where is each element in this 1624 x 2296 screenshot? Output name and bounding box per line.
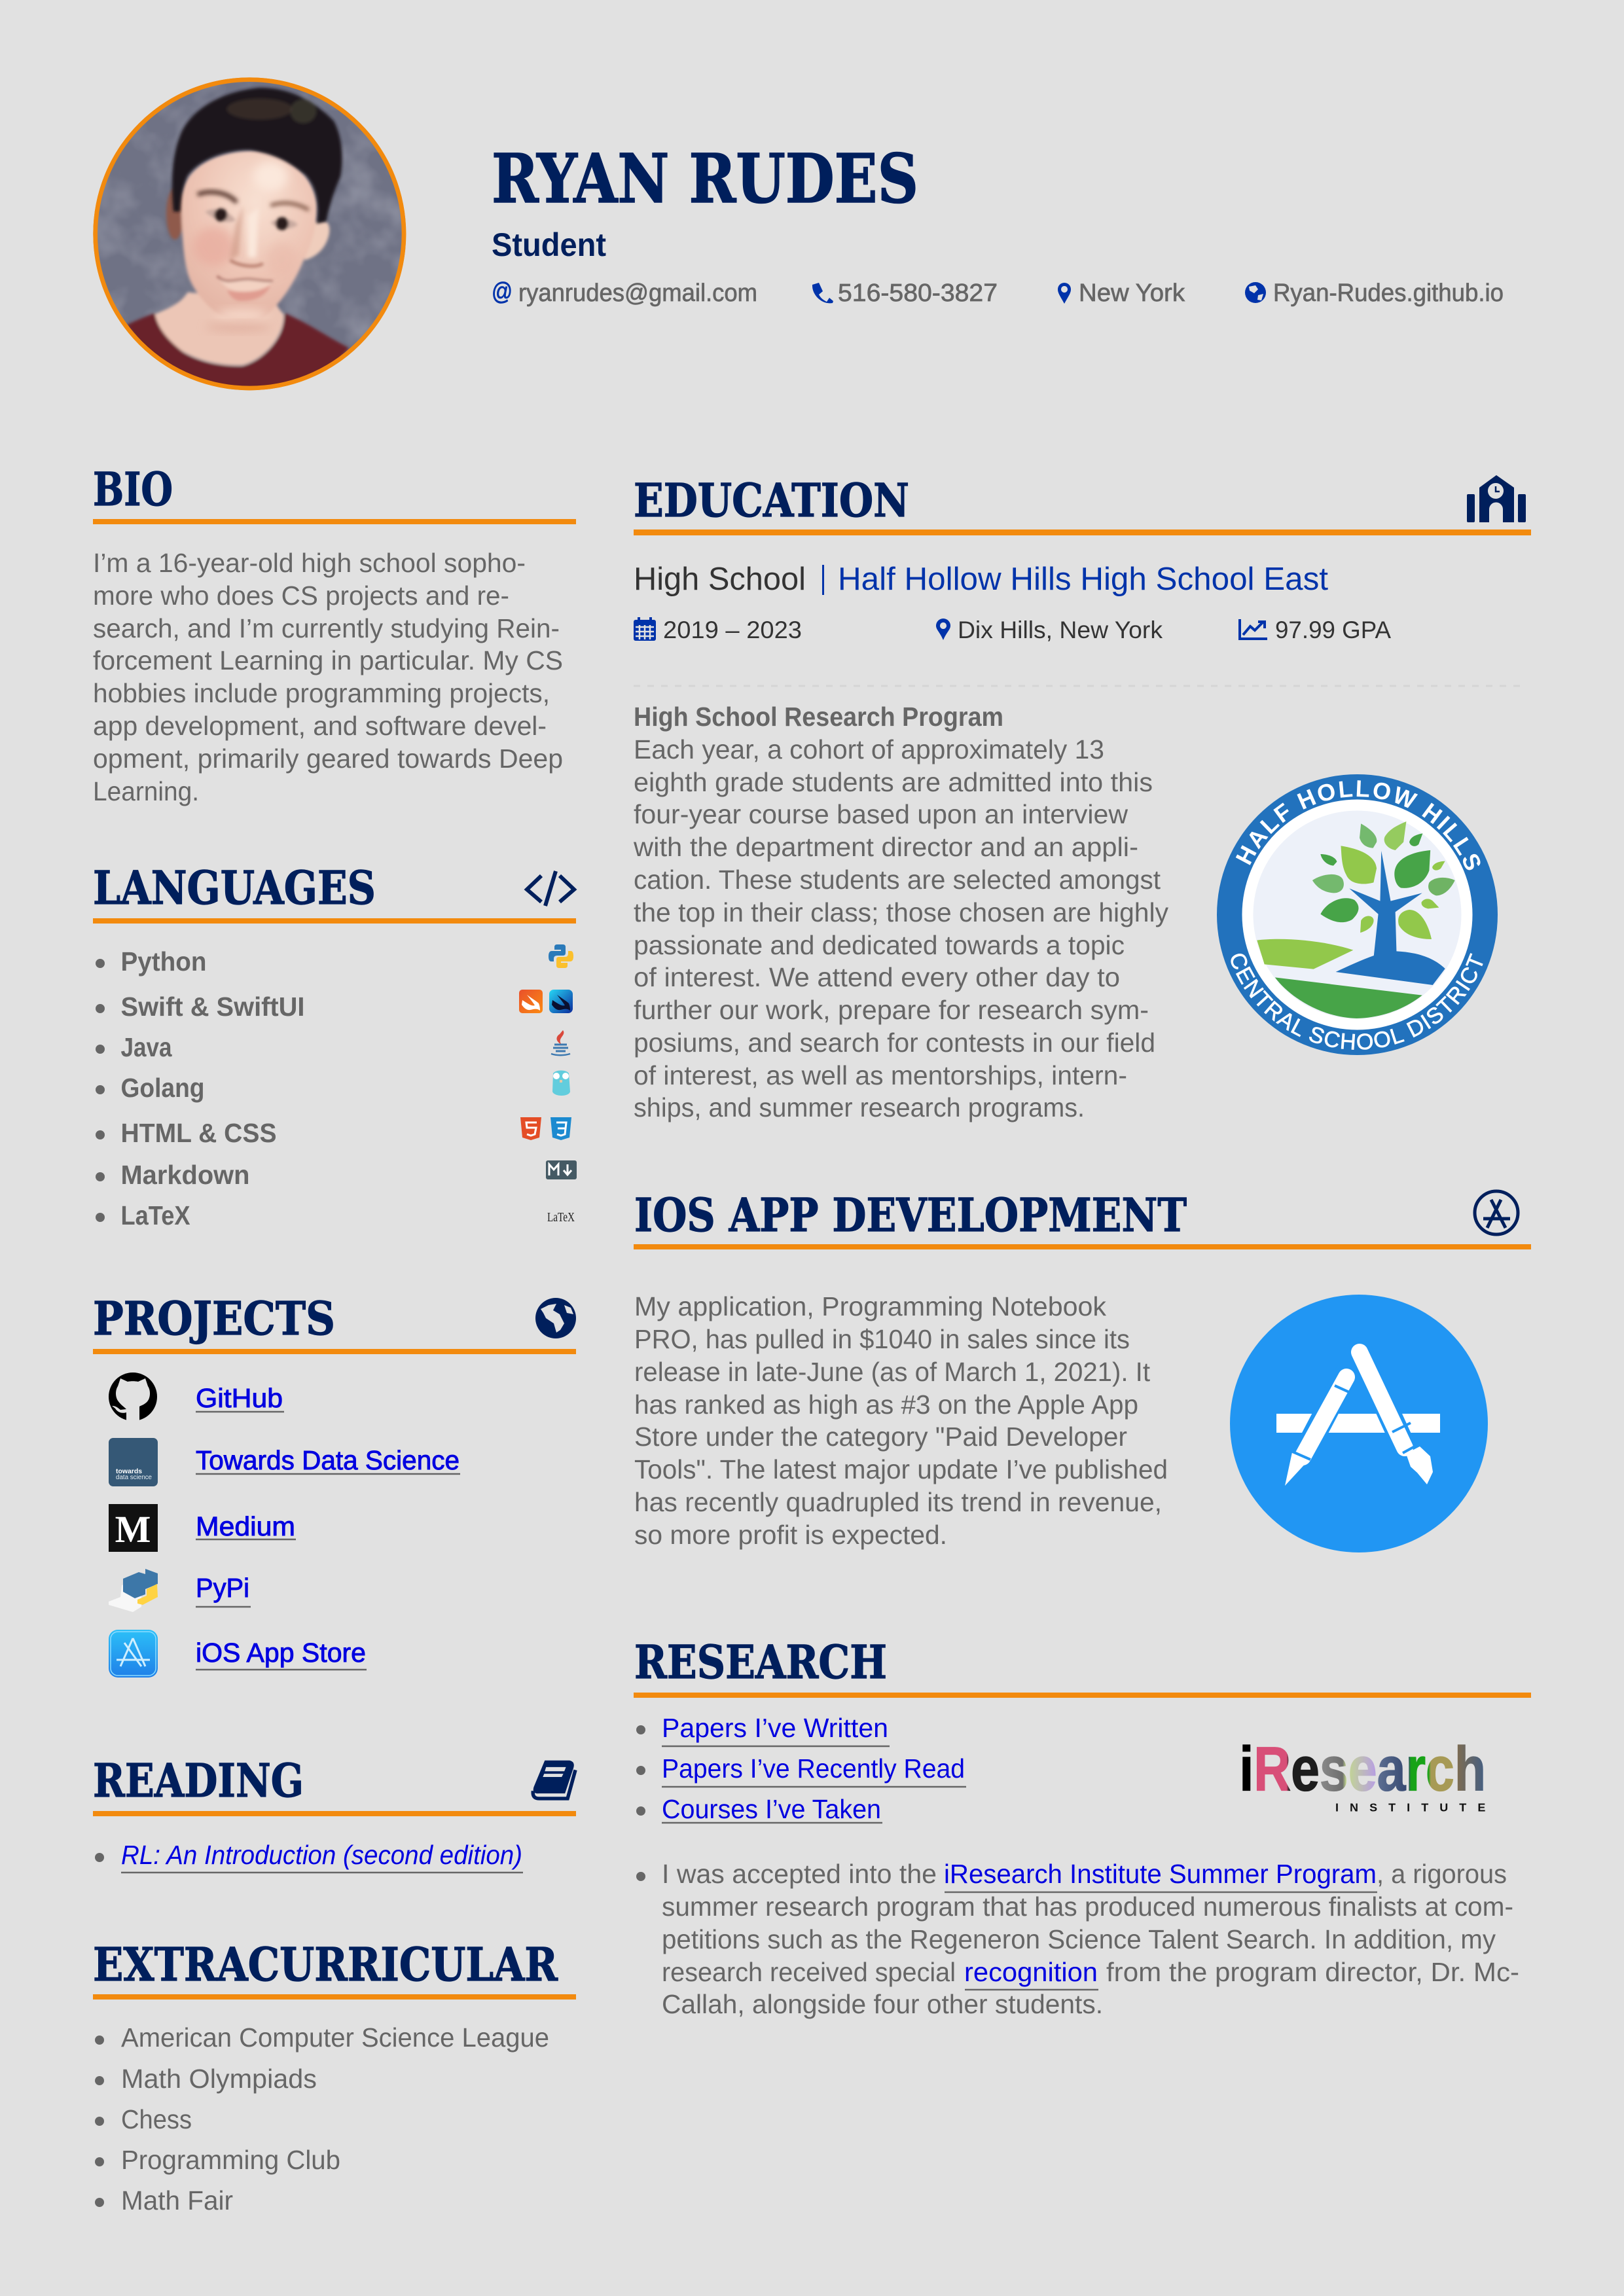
app description: release in late-June (as of March 1, 2021). It [634,1357,1151,1387]
panel: bio [93,462,576,806]
extracurricular list: Programming Club [121,2145,340,2175]
panel: ios app development [634,1188,1531,1552]
heading: extracurricular: EXTRACURRICULAR [93,1937,558,1992]
research links list: Courses I’ve Taken [662,1794,881,1824]
location: New York [1079,279,1185,307]
bio text: Learning. [93,776,199,806]
extracurricular list: Math Fair [121,2185,233,2215]
language list [96,946,305,1230]
icon: towards data science: towards [116,1468,142,1475]
icon: pin [936,619,950,640]
link: towards data science: Towards Data Science [196,1445,460,1475]
mouth [219,278,272,293]
icon: python [549,944,573,968]
research links list: Papers I’ve Written [662,1713,888,1743]
logo: half hollow hills: CENTRAL SCHOOL DISTRICT [1231,953,1483,1050]
language list: HTML & CSS [120,1118,276,1148]
icon: towards data science: data science [116,1474,152,1481]
email: ryanrudes@gmail.com [518,279,757,307]
research links list [636,1713,966,1824]
icon: github [109,1372,157,1422]
language list: Java [120,1032,173,1062]
icon: markdown [546,1160,577,1179]
research program text: posiums, and search for contests in our field [634,1028,1155,1058]
research program text: passionate and dedicated towards a topic [634,930,1125,960]
extracurricular list: Chess [121,2104,192,2134]
icon: swift [519,990,543,1013]
icon: code [527,871,574,906]
icon: chart [1240,619,1267,639]
research program text: the top in their class; those chosen are highly [634,897,1168,927]
icon: book [533,1761,575,1799]
research program text: of interest, as well as mentorships, intern- [634,1060,1127,1090]
bio text [93,548,563,806]
school details [634,617,1391,643]
reading list item: RL: An Introduction (second edition) [121,1840,522,1870]
icon: medium: M [115,1508,151,1551]
research program text: High School Research Program [634,702,1003,732]
app description: PRO, has pulled in $1040 in sales since its [634,1324,1130,1354]
link: medium: Medium [196,1511,295,1541]
app description: My application, Programming Notebook [634,1291,1106,1321]
link: ios app store: iOS App Store [196,1638,366,1668]
extracurricular list [95,2022,549,2215]
icon: globe [1245,282,1266,303]
research program text: eighth grade students are admitted into this [634,767,1153,797]
right ear [304,221,329,260]
name: RYAN RUDES [492,139,918,219]
icon: latex: LaTeX [547,1210,575,1225]
research paragraph: recognition [964,1957,1098,1987]
school location: Dix Hills, New York [958,617,1163,643]
heading: languages: LANGUAGES [93,861,376,915]
link: github: GitHub [196,1383,283,1413]
icon: css3 [550,1117,571,1140]
job title: Student [492,226,606,263]
language list: Swift & SwiftUI [120,992,305,1022]
bio text: opment, primarily geared towards Deep [93,744,563,774]
app description: Tools". The latest major update I’ve published [634,1454,1168,1484]
icon: at sign: @ [492,278,513,306]
nose [230,260,263,266]
panel: languages [93,861,577,1230]
shirt [127,312,350,386]
icon: location pin [1058,283,1071,304]
research paragraph: Callah, alongside four other students. [662,1989,1103,2019]
research program text: ships, and summer research programs. [634,1092,1085,1122]
dates: 2019 – 2023 [663,617,802,643]
panel: education [633,473,1531,1122]
left ear [166,188,184,240]
heading: reading: READING [93,1753,304,1808]
bio text: hobbies include programming projects, [93,678,550,708]
app description: so more profit is expected. [634,1520,947,1550]
heading: education: EDUCATION [634,473,909,528]
logo: iresearch institute: iResearch [1239,1735,1486,1804]
research program text: further our work, prepare for research sym- [634,995,1149,1025]
app description: has ranked as high as #3 on the Apple App [634,1390,1138,1420]
app description [634,1291,1168,1550]
school line: Half Hollow Hills High School East [838,562,1328,597]
website: Ryan-Rudes.github.io [1273,279,1504,307]
bio text: I’m a 16-year-old high school sopho- [93,548,526,578]
hair [172,88,342,224]
heading: ios app development: IOS APP DEVELOPMENT [634,1188,1187,1242]
school line: High School [634,562,806,597]
panel: reading [93,1753,576,1873]
heading: research: RESEARCH [634,1635,887,1689]
research paragraph: iResearch Institute Summer Program [944,1859,1377,1889]
logo: iresearch institute: INSTITUTE [1335,1801,1485,1814]
app description: Store under the category "Paid Developer [634,1422,1127,1452]
contact row [492,278,1504,307]
phone number: 516-580-3827 [838,279,998,307]
profile photo [85,72,412,404]
extracurricular list: American Computer Science League [121,2022,549,2053]
research program text: of interest. We attend every other day to [634,962,1120,992]
research program text [633,702,1168,1122]
app description: has recently quadrupled its trend in revenue, [634,1487,1162,1517]
logo: half hollow hills: HALF HOLLOW HILLS [1236,780,1481,870]
icon: towards data science [109,1438,158,1486]
gpa: 97.99 GPA [1275,617,1391,643]
extracurricular list: Math Olympiads [121,2064,317,2094]
icon: calendar [634,617,656,641]
icon: school [1467,475,1526,522]
research program text: Each year, a cohort of approximately 13 [634,734,1104,764]
panel: research [634,1635,1531,2019]
icon: app store large [1230,1295,1488,1552]
icon: html5 [520,1117,541,1140]
research links list: Papers I’ve Recently Read [662,1753,965,1784]
icon: phone [812,283,833,303]
panel: projects [93,1291,576,1677]
face [181,151,317,320]
bio text: forcement Learning in particular. My CS [93,645,563,675]
research paragraph: , a rigorous [1377,1859,1507,1889]
heading: projects: PROJECTS [93,1291,335,1346]
icon: swiftui [549,990,573,1013]
language list: Python [120,946,207,977]
icon: pypi [109,1569,158,1612]
icon: app store outline [1475,1191,1518,1234]
eyes [205,209,236,222]
bio text: more who does CS projects and re- [93,581,509,611]
research program text: with the department director and an appli- [633,832,1138,862]
neck [155,293,283,365]
research program text: cation. These students are selected amongst [634,865,1161,895]
icon: java [551,1030,570,1055]
bio text: app development, and software devel- [93,711,547,741]
icon: medium [109,1504,158,1552]
eyebrows [198,192,237,202]
icon: globe [535,1298,576,1338]
panel: extracurricular [93,1937,576,2215]
bio text: search, and I’m currently studying Rein- [93,613,560,643]
research program text: four-year course based upon an interview [634,799,1128,829]
link: pypi: PyPi [196,1573,249,1603]
icon: golang gopher [552,1071,570,1096]
heading: bio: BIO [93,462,173,516]
logo: half hollow hills [1217,774,1498,1055]
research paragraph: petitions such as the Regeneron Science Talent Search. In addition, my [662,1924,1496,1954]
research paragraph: summer research program that has produced numerous finalists at com- [662,1892,1513,1922]
research paragraph [636,1859,1519,2019]
icon: app store square [109,1630,158,1677]
research paragraph: from the program director, Dr. Mc- [1106,1957,1519,1987]
language list: LaTeX [120,1200,190,1230]
language list: Golang [120,1073,204,1103]
research paragraph: I was accepted into the [662,1859,937,1889]
research paragraph: research received special [662,1957,956,1987]
language list: Markdown [120,1160,250,1190]
